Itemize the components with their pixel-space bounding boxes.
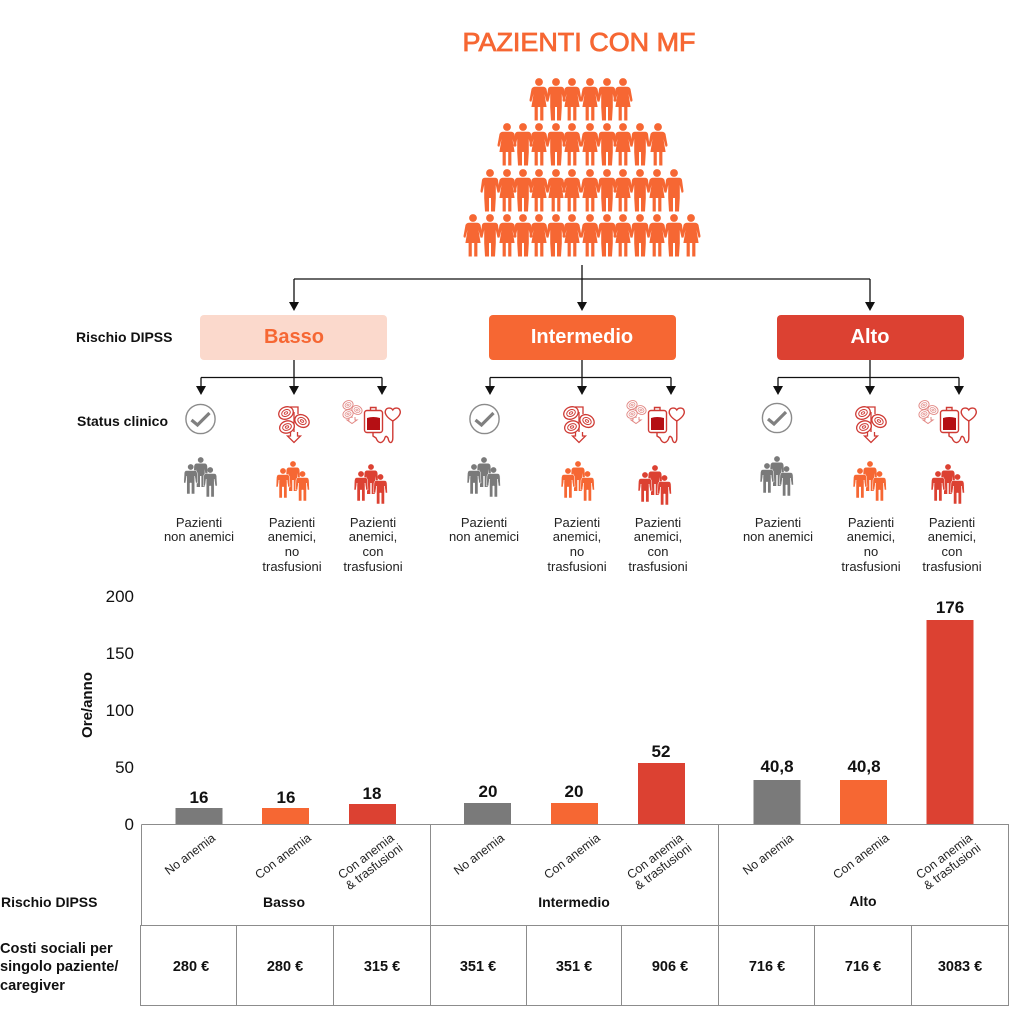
bar chart: 20	[479, 782, 497, 801]
social cost values: 280 €	[173, 959, 209, 975]
labels: Basso patient types: Pazienti	[176, 515, 222, 530]
social cost values: 315 €	[364, 959, 400, 975]
row label: social costs: caregiver	[0, 978, 65, 994]
social cost values: 716 €	[749, 959, 785, 975]
chart axis labels: 0	[125, 815, 134, 834]
rotated category labels: Con anemia	[913, 831, 975, 882]
social cost values: 351 €	[556, 959, 592, 975]
bar chart: 16	[277, 788, 295, 807]
labels: Basso patient types	[164, 515, 403, 574]
axis title: Ore/anno	[79, 672, 96, 738]
labels: Basso patient types: Pazienti	[269, 515, 315, 530]
bar chart: 52	[652, 742, 670, 761]
social cost values: 906 €	[652, 959, 688, 975]
row label: social costs: singolo paziente/	[0, 959, 118, 975]
labels: Intermedio patient types: anemici,	[634, 529, 682, 544]
labels: Alto patient types	[743, 515, 982, 574]
rotated category labels	[162, 831, 983, 893]
title: PAZIENTI CON MF	[462, 27, 696, 57]
social cost values: 351 €	[460, 959, 496, 975]
labels: Intermedio patient types: Pazienti	[554, 515, 600, 530]
chart axis labels: 150	[106, 644, 134, 663]
arrows: Alto branches	[773, 360, 964, 395]
labels: Alto patient types: Pazienti	[848, 515, 894, 530]
rotated category labels: No anemia	[451, 831, 507, 878]
row label: social costs: Costi sociali per	[0, 941, 113, 957]
labels: Intermedio patient types: non anemici	[449, 529, 519, 544]
rotated category labels: Con anemia	[624, 831, 686, 882]
icons: Intermedio status	[470, 399, 684, 443]
labels: Basso patient types: con	[363, 544, 383, 559]
labels: Alto patient types: trasfusioni	[841, 559, 901, 574]
arrows: Basso branches	[196, 360, 387, 395]
labels: Basso patient types: trasfusioni	[262, 559, 322, 574]
labels: Alto patient types: Pazienti	[929, 515, 975, 530]
chart axis labels	[106, 587, 134, 834]
icons: Alto status	[762, 399, 976, 443]
labels: Intermedio patient types: Pazienti	[635, 515, 681, 530]
labels: Alto patient types: anemici,	[847, 529, 895, 544]
rotated category labels: No anemia	[162, 831, 218, 878]
rotated category labels: Con anemia	[541, 831, 603, 882]
bar chart: 18	[363, 784, 381, 803]
social cost values: 3083 €	[938, 959, 982, 975]
labels: Intermedio patient types: con	[648, 544, 668, 559]
risk box: Basso	[200, 315, 387, 360]
risk group names	[263, 893, 877, 910]
label: Status clinico: Status clinico	[77, 413, 168, 429]
row label: Rischio DIPSS: Rischio DIPSS	[1, 894, 97, 910]
bar chart	[176, 598, 974, 824]
social cost values: 716 €	[845, 959, 881, 975]
labels: Alto patient types: non anemici	[743, 529, 813, 544]
icons: Intermedio patient groups	[467, 457, 672, 505]
labels: Intermedio patient types: Pazienti	[461, 515, 507, 530]
labels: Intermedio patient types: trasfusioni	[547, 559, 607, 574]
rotated category labels: No anemia	[740, 831, 796, 878]
row label: social costs	[0, 941, 118, 994]
risk group names: Basso	[263, 894, 305, 910]
chart axis labels: 200	[106, 587, 134, 606]
labels: Basso patient types: non anemici	[164, 529, 234, 544]
labels: Alto patient types: con	[942, 544, 962, 559]
arrows: Intermedio branches	[485, 360, 676, 395]
labels: Alto patient types: anemici,	[928, 529, 976, 544]
labels: Basso patient types: no	[285, 544, 299, 559]
social cost values	[173, 959, 982, 975]
rotated category labels: & trasfusioni	[343, 841, 405, 893]
risk group names: Intermedio	[538, 894, 610, 910]
labels: Alto patient types: Pazienti	[755, 515, 801, 530]
label: Rischio DIPSS: Rischio DIPSS	[76, 329, 172, 345]
labels: Intermedio patient types: trasfusioni	[628, 559, 688, 574]
risk box: Basso: Basso	[264, 326, 324, 348]
rotated category labels: & trasfusioni	[921, 841, 983, 893]
icon: crowd of patients pyramid	[464, 78, 700, 256]
rotated category labels: Con anemia	[335, 831, 397, 882]
bar chart: 176	[936, 598, 964, 617]
labels: Basso patient types: anemici,	[349, 529, 397, 544]
social cost values: 280 €	[267, 959, 303, 975]
risk group names: Alto	[849, 893, 877, 909]
bar chart: 40,8	[847, 757, 881, 776]
risk box: Alto: Alto	[851, 326, 889, 348]
labels: Basso patient types: trasfusioni	[343, 559, 403, 574]
bar chart: 16	[190, 788, 208, 807]
bar chart: 20	[565, 782, 583, 801]
risk box: Intermedio: Intermedio	[531, 326, 633, 348]
risk box: Intermedio	[489, 315, 676, 360]
rotated category labels: Con anemia	[252, 831, 314, 882]
icons: Alto patient groups	[760, 456, 964, 504]
icons: Basso status	[186, 399, 400, 443]
rotated category labels: Con anemia	[830, 831, 892, 882]
labels: Intermedio patient types: anemici,	[553, 529, 601, 544]
icons: Basso patient groups	[184, 457, 388, 504]
labels: Intermedio patient types: no	[570, 544, 584, 559]
labels: Basso patient types: Pazienti	[350, 515, 396, 530]
labels: Basso patient types: anemici,	[268, 529, 316, 544]
table grid	[140, 824, 1008, 1006]
labels: Alto patient types: trasfusioni	[922, 559, 982, 574]
risk box: Alto	[777, 315, 964, 360]
chart axis labels: 100	[106, 701, 134, 720]
rotated category labels: & trasfusioni	[632, 841, 694, 893]
bar chart: 40,8	[760, 757, 794, 776]
labels: Intermedio patient types	[449, 515, 688, 574]
arrow tree: risk groups	[289, 265, 875, 311]
labels: Alto patient types: no	[864, 544, 878, 559]
chart axis labels: 50	[115, 758, 134, 777]
